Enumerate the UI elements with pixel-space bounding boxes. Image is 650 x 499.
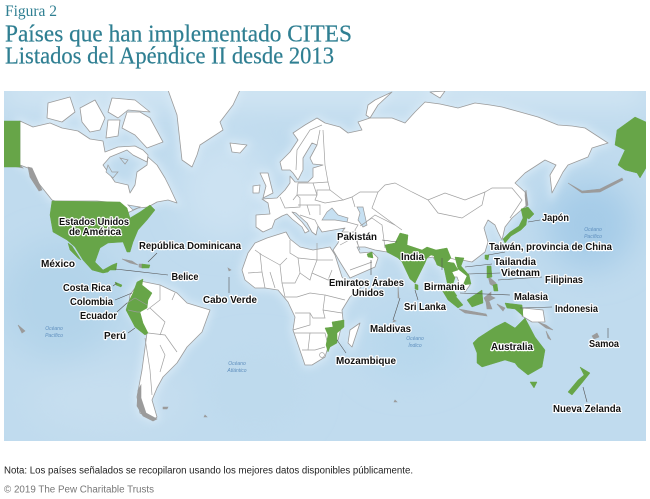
borders xyxy=(145,125,522,395)
country labels: Filipinas xyxy=(545,275,583,286)
Dominican Republic xyxy=(142,264,150,268)
country labels: Taiwán, provincia de China xyxy=(489,242,612,253)
ocean labels: Pacífico xyxy=(45,333,63,339)
Taiwan xyxy=(485,255,489,260)
Colombia Ecuador Peru xyxy=(126,279,152,335)
heading: figure number: Figura 2 xyxy=(5,3,57,20)
ocean labels: Océano xyxy=(406,336,424,342)
United States and Mexico xyxy=(50,201,155,273)
country labels: Tailandia xyxy=(494,257,536,268)
Alaska east xyxy=(615,117,646,178)
copyright: © 2019 The Pew Charitable Trusts xyxy=(4,484,154,496)
country labels: México xyxy=(41,259,75,270)
country labels: Emiratos Árabes xyxy=(329,276,404,289)
inland water xyxy=(106,158,367,227)
ocean labels: Atlántico xyxy=(226,368,247,374)
country labels: de América xyxy=(69,227,121,238)
gray non-listed coasts and islands xyxy=(8,152,638,421)
country labels: Birmania xyxy=(424,282,465,293)
Alaska west xyxy=(4,121,20,167)
Mozambique xyxy=(325,320,344,352)
note: Nota: Los países señalados se recopilaron usando los mejores datos disponibles públicamente. xyxy=(4,466,413,476)
country labels: Sri Lanka xyxy=(404,302,446,313)
ocean labels: Pacífico xyxy=(584,234,602,240)
United Arab Emirates xyxy=(367,252,373,258)
leader lines xyxy=(113,220,608,402)
land: base continents xyxy=(20,90,608,420)
country labels: República Dominicana xyxy=(139,241,241,252)
Baja California xyxy=(68,243,81,260)
Japan xyxy=(503,207,534,243)
Myanmar and Thailand xyxy=(434,248,458,292)
country labels: Ecuador xyxy=(80,311,117,322)
Malaysia and Indonesia xyxy=(442,290,463,308)
Sri Lanka xyxy=(415,284,418,290)
ocean labels: Índico xyxy=(408,342,422,349)
Australia xyxy=(473,318,545,375)
country labels: Maldivas xyxy=(370,324,411,335)
country labels: Indonesia xyxy=(555,304,598,315)
ocean labels xyxy=(45,227,602,374)
Pakistan and India xyxy=(385,233,438,283)
country labels: Estados Unidos xyxy=(59,217,129,228)
country labels xyxy=(41,213,621,415)
country labels: Malasia xyxy=(514,292,548,303)
panel: world map xyxy=(0,86,646,441)
title: Listados del Apéndice II desde 2013 xyxy=(5,44,334,70)
country labels: Cabo Verde xyxy=(203,295,257,306)
Costa Rica xyxy=(115,282,122,287)
highlighted countries xyxy=(4,117,646,395)
country labels: Japón xyxy=(542,213,569,224)
New Zealand xyxy=(568,367,590,395)
country labels: Perú xyxy=(104,331,126,342)
country labels: Pakistán xyxy=(337,232,377,243)
country labels: Colombia xyxy=(70,297,113,308)
country labels: Vietnam xyxy=(501,268,540,279)
country labels: Costa Rica xyxy=(63,283,111,294)
Philippines xyxy=(487,266,492,278)
country labels: Belice xyxy=(172,272,199,283)
title: Países que han implementado CITES xyxy=(5,22,352,48)
country labels: Mozambique xyxy=(336,356,396,367)
country labels: Samoa xyxy=(589,339,619,350)
ocean labels: Océano xyxy=(228,361,246,367)
country labels: Nueva Zelanda xyxy=(553,404,621,415)
ocean labels: Océano xyxy=(45,326,63,332)
Vietnam xyxy=(455,257,471,285)
country labels: India xyxy=(401,252,424,263)
ocean labels: Océano xyxy=(584,227,602,233)
country labels: Unidos xyxy=(352,288,384,299)
title xyxy=(5,22,352,70)
country labels: Australia xyxy=(491,342,533,353)
